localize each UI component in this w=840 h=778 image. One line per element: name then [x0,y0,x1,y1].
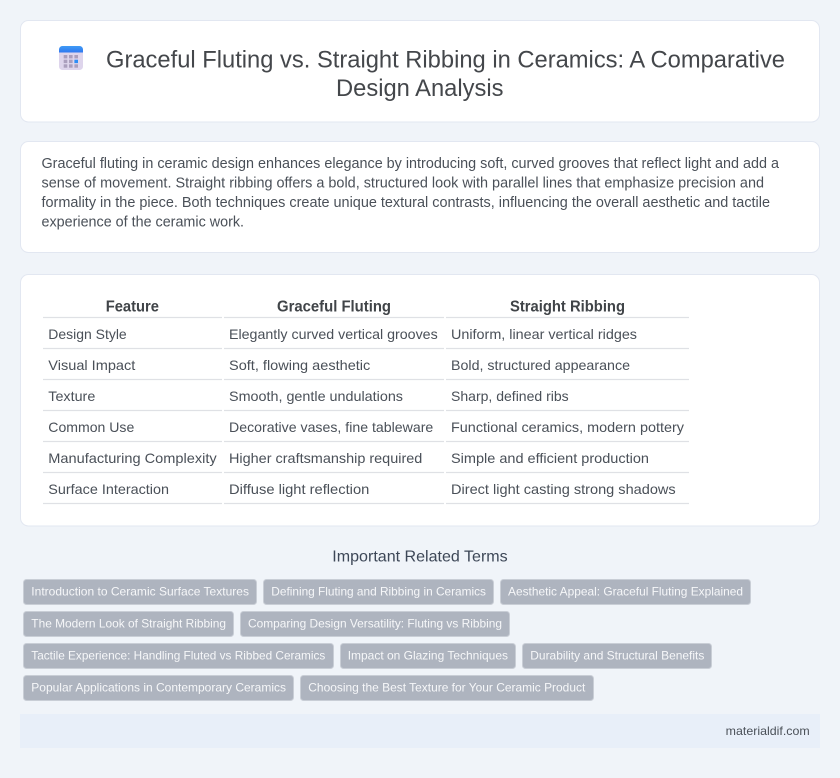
table row: visual impact [43,357,689,380]
tag: Introduction to Ceramic Surface Textures [31,585,249,599]
table header: Feature [106,299,159,316]
table row: common use: Common Use [48,419,135,435]
tag: Choosing the Best Texture for Your Ceramic Product [308,681,586,695]
table row: manufacturing complexity: Simple and efficient production [451,450,649,466]
tag: The Modern Look of Straight Ribbing [31,617,226,631]
intro text [42,156,779,230]
intro text: formality in the piece. Both techniques create unique textural contrasts, influencing the overall aesthetic and tactile [42,195,770,211]
tag [24,676,294,700]
table header: Straight Ribbing [510,299,625,316]
title [106,46,785,102]
table row: manufacturing complexity: Manufacturing Complexity [48,450,217,466]
footer source text: materialdif.com [726,724,810,738]
tag: Defining Fluting and Ribbing in Ceramics [271,585,486,599]
table row: visual impact: Soft, flowing aesthetic [229,357,370,373]
table header: Graceful Fluting [277,299,391,316]
intro text: sense of movement. Straight ribbing offers a bold, structured look with parallel lines that emphasize precision and [42,176,764,192]
table row: surface interaction: Diffuse light reflection [229,481,369,497]
table row: common use: Decorative vases, fine tableware [229,419,434,435]
table row: texture: Texture [48,388,96,404]
tag [24,644,334,668]
tag [522,644,712,668]
related terms tags [24,580,750,700]
table row: design style [43,326,689,348]
table row: manufacturing complexity: Higher craftsmanship required [229,450,422,466]
footer [20,714,820,748]
tag [24,612,234,636]
tag [500,580,750,604]
table row: surface interaction [43,481,689,504]
related terms heading: Important Related Terms [332,549,508,566]
tag [340,644,516,668]
header panel [20,20,820,122]
panel: intro paragraph [20,142,820,252]
tag [240,612,510,636]
panel: comparison table [20,274,820,526]
tag: Impact on Glazing Techniques [348,649,508,663]
table row: texture [43,388,689,410]
tag: Durability and Structural Benefits [530,649,704,663]
tag: Popular Applications in Contemporary Ceramics [31,681,286,695]
table row: texture: Smooth, gentle undulations [229,388,403,404]
tag: Tactile Experience: Handling Fluted vs Ribbed Ceramics [31,649,325,663]
table row: surface interaction: Direct light casting strong shadows [451,481,676,497]
title: Design Analysis [336,75,504,102]
table row: design style: Design Style [48,326,127,342]
tag [264,580,494,604]
icon: calendar [59,46,83,70]
table row: design style: Elegantly curved vertical grooves [229,326,438,342]
tag [24,580,256,604]
tag: Aesthetic Appeal: Graceful Fluting Explained [508,585,743,599]
table row: visual impact: Visual Impact [48,357,135,373]
table row: texture: Sharp, defined ribs [451,388,569,404]
table row: common use [43,419,689,442]
intro text: Graceful fluting in ceramic design enhances elegance by introducing soft, curved grooves that reflect light and add a [42,156,779,172]
table row: common use: Functional ceramics, modern pottery [451,419,684,435]
table row: visual impact: Bold, structured appearance [451,357,630,373]
table row: design style: Uniform, linear vertical ridges [451,326,637,342]
table row: surface interaction: Surface Interaction [48,481,169,497]
table row: manufacturing complexity [43,450,689,472]
tag: Comparing Design Versatility: Fluting vs Ribbing [248,617,502,631]
table header [43,299,689,318]
tag [300,676,594,700]
intro text: experience of the ceramic work. [42,214,244,230]
title: Graceful Fluting vs. Straight Ribbing in Ceramics: A Comparative [106,46,785,74]
